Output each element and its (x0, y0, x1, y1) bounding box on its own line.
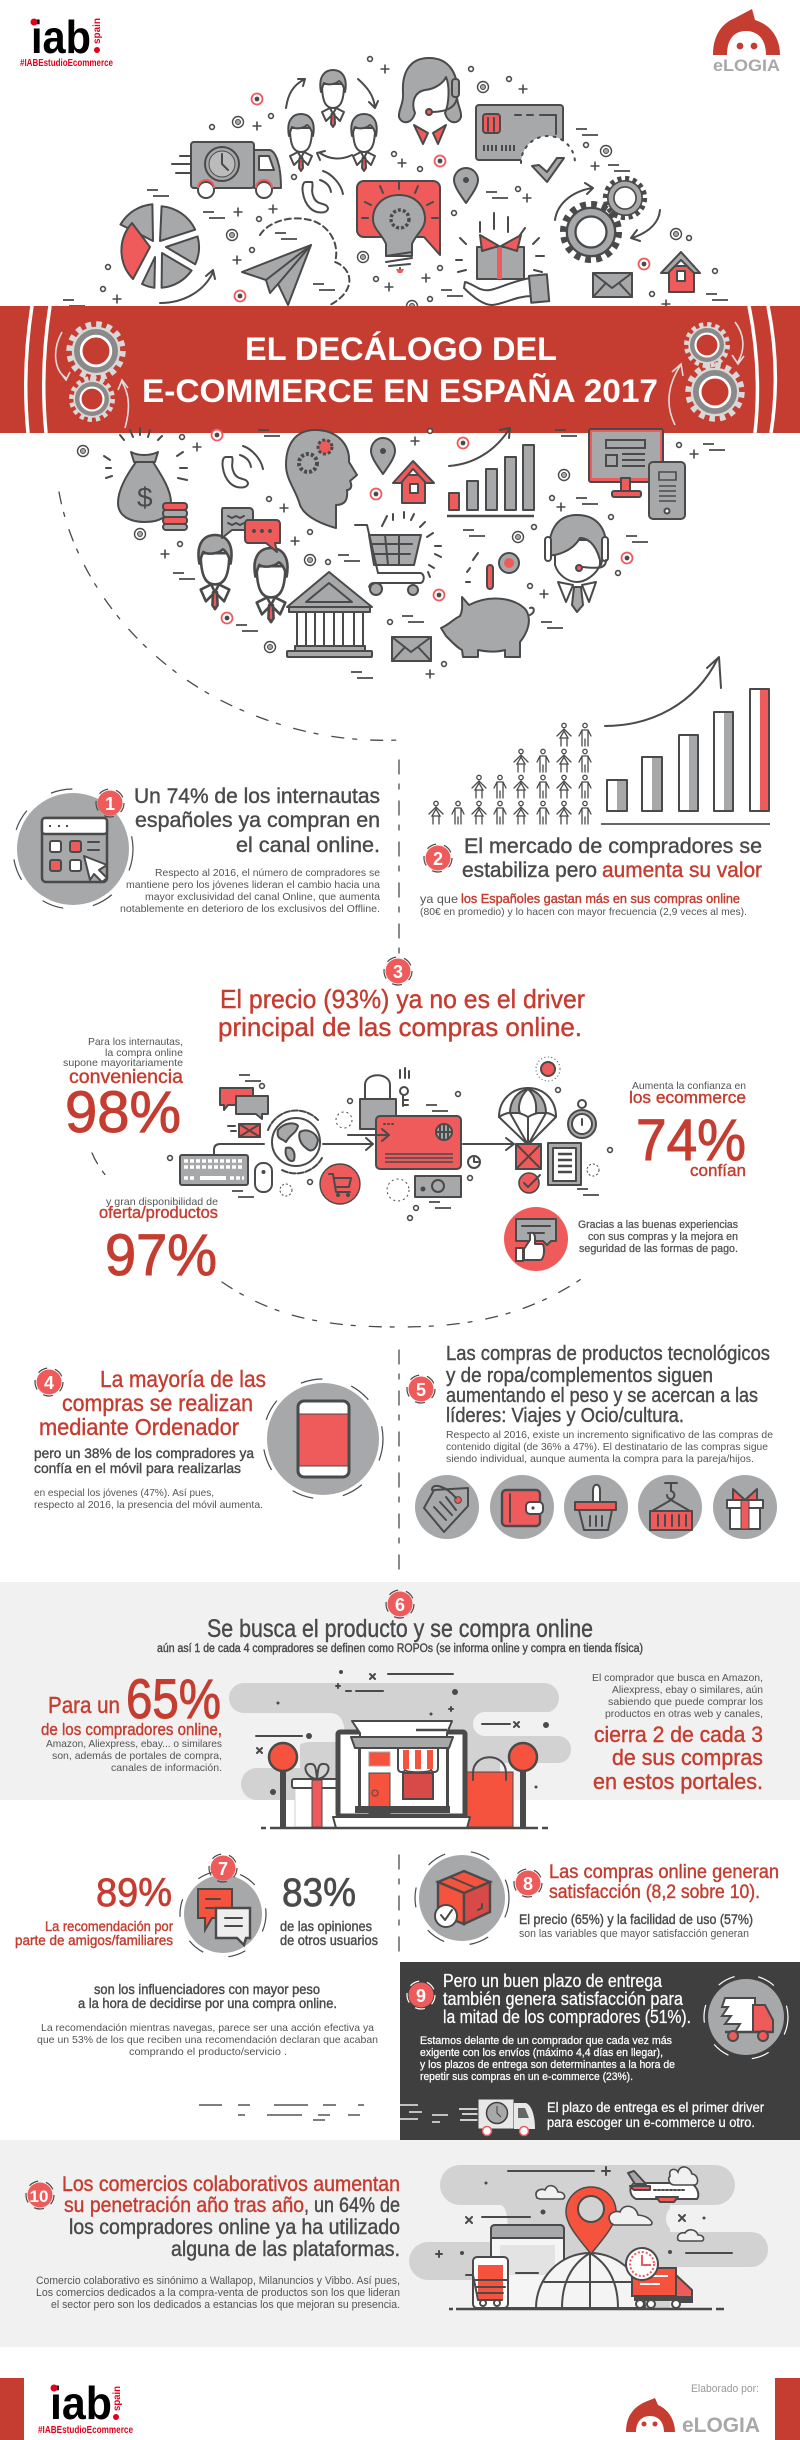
bar chart (601, 689, 770, 824)
icon: pie chart (120, 204, 199, 288)
icon: thumb up circle (504, 1207, 568, 1271)
panel: point 4 (34, 1366, 383, 1511)
dashed divider (398, 760, 400, 953)
logo: iab top: iab (31, 11, 91, 63)
stat 83%: de otros usuarios (280, 1932, 378, 1948)
badge 8 (514, 1869, 542, 1897)
dashed divider 7/8 (398, 1855, 400, 1955)
heading 4: mediante Ordenador (39, 1414, 239, 1440)
text: confianza 74%: los ecommerce (629, 1088, 746, 1107)
icon: arrow by pie (160, 270, 215, 303)
text: confianza 74%: Aumenta la confianza en (632, 1080, 746, 1092)
panel: point 9 (400, 1962, 800, 2140)
text 9: Estamos delante de un comprador que cada vez más (420, 2035, 672, 2047)
heading 10 (62, 2173, 400, 2261)
heading 9 (443, 1971, 691, 2027)
heading 3 (218, 984, 585, 1042)
badge 7: 7 (218, 1859, 228, 1879)
icon: two people with chat bubbles (198, 508, 288, 622)
heading 1: españoles ya compran en (135, 809, 380, 832)
logo: iab footer: iab (50, 2377, 112, 2429)
text 7: que un 53% de los que reciben una recomendación declaran que acaban (37, 2034, 378, 2046)
heading 2: estabiliza pero (462, 859, 597, 882)
text 9 (420, 2035, 675, 2083)
dashed arc upper left (59, 492, 400, 740)
pictogram: shoppers (429, 723, 591, 824)
logo: iab top (20, 11, 113, 69)
text 9: repetir sus compras en un e-commerce (23%). (420, 2071, 633, 2083)
text: oferta 97% (99, 1196, 218, 1288)
dashed divider 4/5 (398, 1350, 400, 1572)
icon: envelope (593, 273, 632, 297)
panel: point 8 (415, 1851, 779, 1945)
badge 2: 2 (433, 849, 443, 869)
text 5: Respecto al 2016, existe un incremento significativo de las compras de (446, 1429, 773, 1441)
text: plazo de entrega: para escoger un e-commerce u otro. (547, 2115, 755, 2130)
text 5: contenido digital (de 36% a 47%). El destinatario de las compras sigue (446, 1441, 768, 1453)
text 1 (120, 867, 380, 915)
text 7: La recomendación mientras navegas, parece ser una acción efectiva ya (41, 2022, 374, 2034)
heading 3: principal de las compras online. (218, 1012, 582, 1042)
heading 5: y de ropa/complementos siguen (446, 1365, 713, 1387)
dashed arc lower (92, 1153, 587, 1327)
badge 4: 4 (44, 1373, 54, 1393)
banner: title: EL DECÁLOGO DEL (245, 331, 557, 367)
icon: shopping cart (355, 512, 441, 595)
icon: check badge (521, 136, 575, 190)
icon: pin 2 (371, 438, 395, 474)
heading 9: la mitad de los compradores (51%). (443, 2007, 691, 2027)
badge 10: 10 (30, 2187, 48, 2206)
text 10: Los comercios dedicados a la compra-venta de productos son los que lideran (36, 2287, 400, 2299)
text: confianza 74%: 74% (636, 1108, 746, 1173)
banner: title (0, 306, 800, 433)
heading 9: Pero un buen plazo de entrega (443, 1971, 663, 1991)
badge 8: 8 (523, 1874, 533, 1894)
icon: credit card (476, 105, 563, 160)
text: conveniencia 98%: Para los internautas, (88, 1036, 183, 1048)
icon: bank (287, 572, 372, 657)
text: para un 65%: Para un (48, 1692, 120, 1718)
badge 3: 3 (393, 962, 403, 982)
heading 1: el canal online. (236, 834, 380, 857)
badge 4 (35, 1368, 63, 1396)
text 7: comprando el producto/servicio . (129, 2046, 287, 2058)
logo: elogia top: eLOGIA (713, 56, 780, 75)
icon: three people with arrows (286, 70, 378, 171)
icon: delivery truck (172, 142, 281, 198)
icon row: categories (415, 1475, 777, 1539)
heading 4: La mayoría de las (100, 1366, 266, 1392)
text 8: El precio (65%) y la facilidad de uso (57%) (519, 1912, 753, 1927)
text 2: los Españoles gastan más en sus compras online (461, 892, 740, 906)
icon: box circle (415, 1851, 509, 1945)
text: gracias: con sus compras y la mejora en (588, 1231, 738, 1243)
panel: point 10 (0, 2140, 800, 2347)
heading 2 (462, 835, 762, 882)
text 9: exigente con los envíos (máximo 4,4 días en llegar), (420, 2047, 663, 2059)
text: cierra 2 de cada 3: Aliexpress, ebay o similares, aún (612, 1684, 763, 1696)
icon: paper plane with dashed trail (242, 218, 349, 305)
heading 1 (134, 785, 380, 857)
panel: point 2 (420, 657, 770, 918)
heading 10: , un 64% de (304, 2194, 400, 2217)
badge 1: 1 (105, 794, 115, 814)
heading 10: Los comercios colaborativos aumentan (62, 2173, 400, 2196)
icon: chat bubbles circle (180, 1871, 266, 1957)
chart: purchase flow illustration (168, 1057, 612, 1220)
badge 5 (407, 1375, 435, 1403)
text 4: respecto al 2016, la presencia del móvil aumenta. (34, 1499, 263, 1511)
text 1: notablemente en deterioro de los exclusivos del Offline. (120, 903, 380, 915)
heading 8: Las compras online generan (549, 1862, 779, 1883)
decorative dots, rings, plus signs (top hemisphere) (63, 57, 728, 311)
illustration: store (227, 1670, 583, 1828)
badge 6 (386, 1590, 414, 1618)
panel: point 1 (13, 785, 380, 915)
stat 83%: 83% (282, 1871, 356, 1915)
heading 5 (446, 1343, 770, 1427)
icon: location pin (454, 168, 478, 203)
logo: elogia footer (626, 2398, 760, 2437)
decorative dots, rings, plus signs (bottom hemisphere) (78, 429, 725, 678)
subheading 4: pero un 38% de los compradores ya (34, 1445, 254, 1461)
text 10 (36, 2275, 400, 2311)
text: cierra 2 de cada 3: sabiendo que puede comprar los (608, 1696, 763, 1708)
text 5: siendo individual, aunque aumenta la compra para la pareja/hijos. (446, 1453, 754, 1465)
icon: browser in gray circle (13, 789, 133, 909)
text: para un 65%: de los compradores online, (41, 1720, 222, 1739)
icon: gift on hand (456, 213, 549, 305)
heading 9: también genera satisfacción para (443, 1989, 684, 2009)
text: oferta 97%: y gran disponibilidad de (106, 1196, 218, 1208)
icon: house 2 (393, 461, 434, 503)
logo: elogia top (713, 9, 780, 75)
icon: money bag (104, 428, 187, 530)
text: para un 65%: Amazon, Aliexpress, ebay... o similares (46, 1738, 222, 1750)
icon: monitor and tablet (589, 429, 685, 519)
badge 10 (26, 2181, 54, 2209)
heading 10: los compradores online ya ha utilizado (69, 2216, 400, 2239)
badge 3 (384, 957, 412, 985)
text: conveniencia 98%: supone mayoritariamente (63, 1057, 183, 1069)
text: elaborado por: Elaborado por: (691, 2383, 759, 2395)
text 2 (420, 892, 747, 918)
heading 10: alguna de las plataformas. (171, 2238, 400, 2261)
banner: title: E-COMMERCE EN ESPAÑA 2017 (142, 373, 658, 409)
stat 83% (280, 1871, 378, 1948)
panel: point 3 (63, 957, 746, 1327)
panel: point 7 (15, 1854, 378, 2120)
text 7 heading: a la hora de decidirse por una compra online. (78, 1996, 337, 2011)
icon: truck circle (704, 1975, 788, 2059)
text 7 heading (78, 1982, 337, 2011)
icon: phone 2 (223, 446, 263, 488)
text 5 (446, 1429, 773, 1465)
badge 9 (407, 1981, 435, 2009)
icon: envelope 2 (392, 637, 431, 661)
stat 89%: parte de amigos/familiares (15, 1932, 173, 1948)
subheading 6: aún así 1 de cada 4 compradores se definen como ROPOs (se informa online y compra en tienda física) (157, 1643, 643, 1655)
icon: lightbulb bubble (357, 181, 440, 273)
text: plazo de entrega: El plazo de entrega es el primer driver (547, 2100, 764, 2115)
icon: agent with headset (545, 515, 608, 612)
badge 2 (424, 844, 452, 872)
subheading 4: confía en el móvil para realizarlas (34, 1460, 241, 1476)
illustration: global delivery (409, 2165, 768, 2309)
arrow: growth (605, 657, 721, 726)
heading 5: aumentando el peso y se acercan a las (446, 1385, 758, 1407)
heading 6: Se busca el producto y se compra online (207, 1615, 593, 1643)
text 1: Respecto al 2016, el número de compradores se (155, 867, 380, 879)
text: gracias: seguridad de las formas de pago. (579, 1243, 738, 1255)
text: cierra 2 de cada 3 (592, 1672, 763, 1794)
text: confianza 74% (629, 1080, 746, 1180)
text: gracias: Gracias a las buenas experiencias (578, 1219, 738, 1231)
heading 8 (549, 1862, 779, 1903)
logo: elogia footer: eLOGIA (682, 2414, 760, 2437)
icon: small truck (400, 2099, 535, 2136)
text: cierra 2 de cada 3: en estos portales. (593, 1769, 763, 1794)
text 4: en especial los jóvenes (47%). Así pues, (34, 1487, 214, 1499)
panel: point 5 (407, 1343, 777, 1539)
text: cierra 2 de cada 3: de sus compras (612, 1745, 763, 1770)
icon: phone (303, 171, 343, 212)
text 1: mayor exclusividad del canal Online, que aumenta (145, 891, 380, 903)
text: conveniencia 98%: 98% (65, 1080, 181, 1145)
text 8: son las variables que mayor satisfacción generan (519, 1928, 749, 1940)
text: confianza 74%: confían (690, 1161, 746, 1180)
text: para un 65%: son, además de portales de compra, (52, 1750, 222, 1762)
badge 9: 9 (416, 1986, 426, 2006)
text: conveniencia 98%: conveniencia (69, 1067, 183, 1088)
icon: mobile in circle (263, 1379, 383, 1499)
speed lines (199, 2105, 364, 2120)
stat 89% (15, 1871, 173, 1948)
text: para un 65%: 65% (126, 1667, 221, 1730)
text 7 heading: son los influenciadores con mayor peso (94, 1982, 320, 1997)
text: cierra 2 de cada 3: cierra 2 de cada 3 (594, 1722, 763, 1747)
text 9: y los plazos de entrega son determinantes a la hora de (420, 2059, 675, 2071)
stat 89%: La recomendación por (45, 1918, 173, 1934)
subheading 4 (34, 1445, 254, 1476)
icon: growth chart (447, 428, 534, 516)
icon: house (661, 252, 700, 292)
heading 2: El mercado de compradores se (464, 835, 762, 858)
text: oferta 97%: 97% (105, 1223, 217, 1288)
badge 6: 6 (395, 1595, 405, 1615)
badge 5: 5 (416, 1380, 426, 1400)
heading 5: líderes: Viajes y Ocio/cultura. (446, 1405, 684, 1427)
icon: head with gears (286, 430, 357, 528)
text 8 (519, 1912, 753, 1940)
text 2: (80€ en promedio) y lo hacen con mayor frecuencia (2,9 veces al mes). (420, 906, 747, 918)
text: para un 65%: canales de información. (111, 1762, 222, 1774)
footer (0, 2377, 800, 2440)
icon: money bag: $ (137, 482, 153, 513)
heading 3: El precio (93%) ya no es el driver (220, 984, 585, 1014)
icon: gears top (555, 178, 660, 260)
logo: iab footer: #IABEstudioEcommerce (38, 2425, 133, 2436)
text: cierra 2 de cada 3: El comprador que busca en Amazon, (592, 1672, 763, 1684)
badge 7 (209, 1854, 237, 1882)
text: cierra 2 de cada 3: productos en otras web y canales, (605, 1708, 763, 1720)
badge 1 (96, 789, 124, 817)
text 2: ya que (420, 892, 458, 906)
text: conveniencia 98%: la compra online (105, 1047, 183, 1059)
text 10: Comercio colaborativo es sinónimo a Wallapop, Milanuncios y Vibbo. Así pues, (36, 2275, 400, 2287)
heading 10: su penetración año tras año (64, 2194, 304, 2217)
text 1: mantiene pero los jóvenes lideran el cambio hacia una (126, 879, 380, 891)
icon: headset woman (399, 58, 461, 144)
heading 4 (39, 1366, 266, 1440)
logo: iab top: spain (92, 18, 103, 44)
heading 5: Las compras de productos tecnológicos (446, 1343, 770, 1365)
logo: iab footer (38, 2377, 133, 2436)
text 4 (34, 1487, 263, 1511)
stat 89%: 89% (96, 1871, 172, 1915)
heading 4: compras se realizan (62, 1390, 253, 1416)
text: oferta 97%: oferta/productos (99, 1203, 218, 1222)
text: gracias (578, 1219, 738, 1255)
text 10: el sector pero son los dedicados a estancias los que mejoran su presencia. (51, 2299, 400, 2311)
text: plazo de entrega (547, 2100, 764, 2130)
icon: piggy bank (441, 553, 534, 657)
heading 1: Un 74% de los internautas (134, 785, 380, 808)
heading 8: satisfacción (8,2 sobre 10). (549, 1882, 760, 1903)
panel: point 6 background (0, 1582, 800, 1800)
text: para un 65% (41, 1667, 222, 1774)
stat 83%: de las opiniones (280, 1918, 372, 1934)
logo: iab footer: spain (112, 2386, 123, 2411)
heading 2: aumenta su valor (602, 859, 762, 882)
text 7 (37, 2022, 378, 2058)
logo: iab top: #IABEstudioEcommerce (20, 58, 113, 69)
text: conveniencia 98% (63, 1036, 183, 1145)
